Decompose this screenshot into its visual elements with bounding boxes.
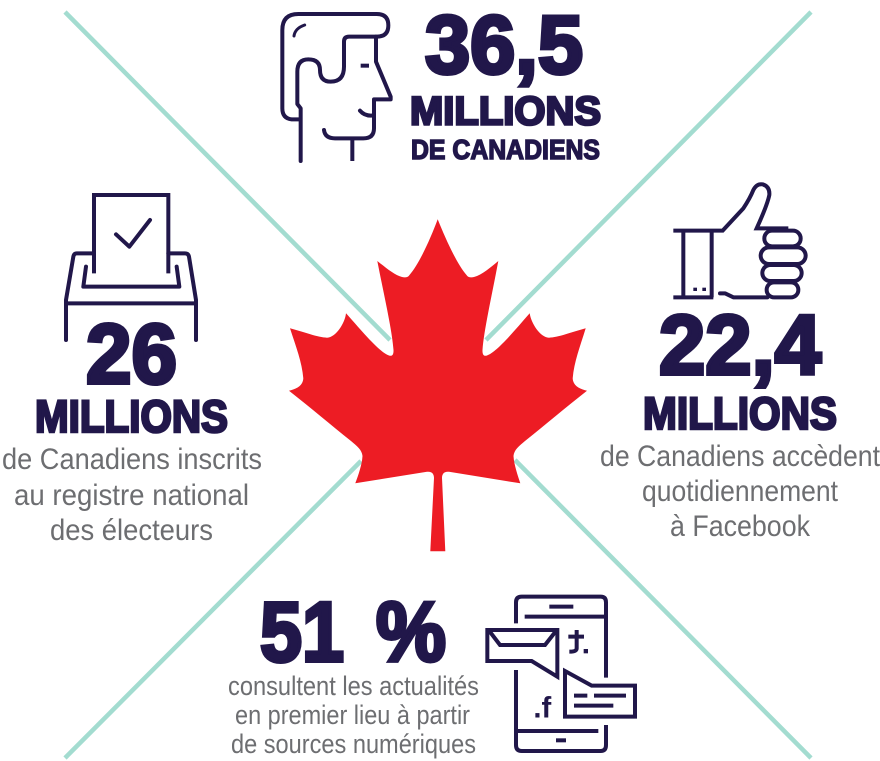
number: 51 %: %: [376, 585, 446, 679]
number: 36,5: 36,5: [425, 0, 583, 91]
number: 22,4: 22,4: [659, 298, 821, 392]
icon: thumbs up: [673, 184, 806, 297]
panel: population: [282, 0, 601, 165]
icon: phone with messages: .f: [533, 692, 551, 725]
description: voters: de Canadiens inscrits: [2, 443, 262, 476]
icon: phone with messages: [487, 597, 635, 751]
panel: registered voters: [2, 195, 262, 547]
label: de canadiens: DE CANADIENS: [411, 134, 600, 165]
description: news: consultent les actualités: [228, 671, 479, 701]
icon: head profile: [282, 14, 391, 161]
description: voters: au registre national: [14, 479, 249, 512]
description: facebook: quotidiennement: [642, 475, 839, 508]
label: millions: MILLIONS: [643, 388, 837, 439]
panel: digital news: [228, 585, 635, 759]
description: news: [228, 671, 479, 759]
description: facebook: à Facebook: [670, 510, 811, 543]
icon: maple leaf: [289, 219, 587, 551]
panel: facebook: [600, 184, 880, 543]
description: voters: [2, 443, 262, 547]
icon: ballot box: [66, 195, 196, 340]
description: news: de sources numériques: [231, 729, 476, 759]
description: voters: des électeurs: [50, 514, 213, 547]
label: millions: MILLIONS: [410, 90, 601, 134]
label: millions: MILLIONS: [35, 391, 228, 442]
number: 26: 26: [86, 307, 177, 401]
description: facebook: [600, 440, 880, 543]
description: news: en premier lieu à partir: [235, 700, 470, 730]
number: 51 %: 51: [260, 585, 344, 679]
